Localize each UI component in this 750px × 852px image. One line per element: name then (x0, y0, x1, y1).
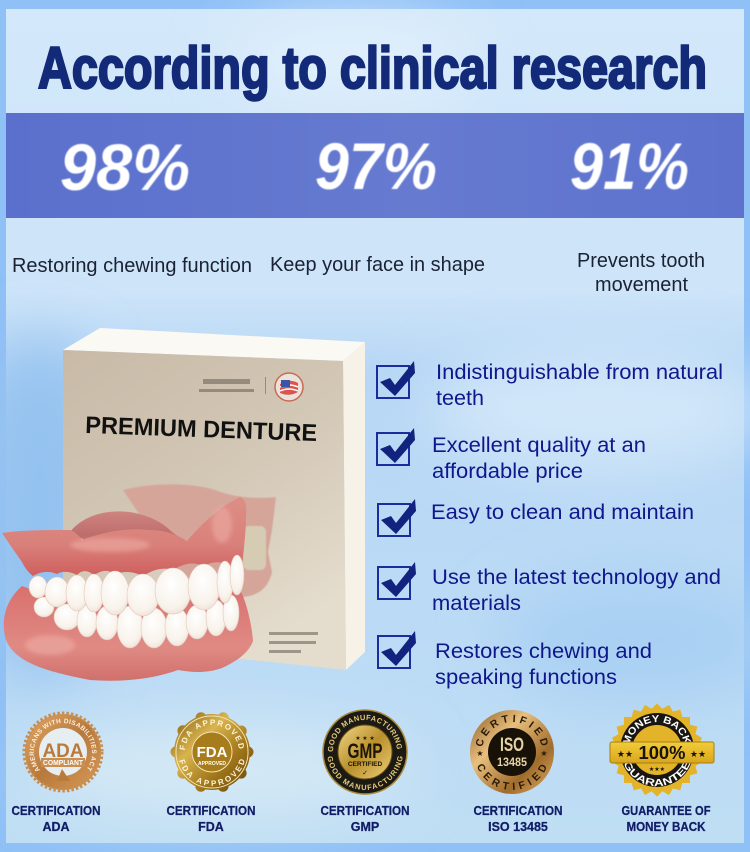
badge: GMP: CERTIFIED (348, 761, 382, 768)
stat: 98%: 98% (60, 130, 190, 204)
badge: money back: GUARANTEE (624, 764, 690, 786)
feature text (432, 434, 646, 483)
badge: ADA: COMPLIANT (43, 760, 84, 767)
label: prevents tooth movement (577, 250, 705, 296)
feature text: speaking functions (435, 666, 617, 689)
lower teeth (34, 595, 239, 648)
badge: FDA: FDA APPROVED (180, 720, 244, 750)
caption: ADA (12, 804, 100, 834)
feature text: Excellent quality at an (432, 434, 646, 457)
statistics band (6, 113, 744, 218)
caption: money back (622, 804, 711, 834)
denture illustration (2, 497, 253, 681)
badge: ADA: AMERICANS WITH DISABILITIES ACT (30, 718, 97, 772)
caption: ISO 13485: ISO 13485 (488, 820, 548, 834)
box top face (63, 328, 365, 361)
badge: FDA: FDA (197, 744, 228, 761)
badge: money back: ★★ (617, 749, 633, 759)
palate (70, 511, 190, 560)
badge: GMP: ★ ★ ★ (355, 735, 375, 742)
feature text (435, 640, 652, 689)
badge: ADA (22, 712, 104, 792)
feature list (377, 361, 723, 689)
caption: ISO 13485: CERTIFICATION (474, 804, 562, 818)
box side face (343, 342, 365, 670)
badge: FDA (170, 712, 254, 792)
feature text: Restores chewing and (435, 640, 652, 663)
badge captions (12, 804, 711, 834)
badge: GMP: ✓ (362, 770, 368, 777)
product box (63, 328, 365, 670)
icon: checkbox (377, 361, 415, 398)
caption: FDA: CERTIFICATION (166, 804, 256, 818)
label: keep your face in shape: Keep your face in shape (270, 254, 485, 276)
caption: ISO 13485 (474, 804, 562, 834)
icon: checkbox (378, 499, 416, 536)
caption: money back: MONEY BACK (626, 820, 706, 834)
caption: ADA: CERTIFICATION (12, 804, 100, 818)
badge: ISO 13485: ★ (540, 749, 548, 758)
feature text: Indistinguishable from natural (436, 361, 723, 384)
feature 1 (377, 361, 723, 410)
feature text (432, 566, 721, 615)
caption: money back: GUARANTEE OF (622, 804, 711, 818)
caption: GMP: CERTIFICATION (320, 804, 410, 818)
feature 3 (378, 499, 694, 536)
label: prevents tooth movement: Prevents tooth (577, 250, 705, 272)
badge: ISO 13485 (470, 710, 554, 794)
caption: ADA: ADA (42, 820, 70, 834)
feature text (436, 361, 723, 410)
label: prevents tooth movement: movement (595, 274, 688, 296)
badge: GMP: GMP (348, 740, 382, 763)
icon: checkbox (377, 428, 415, 465)
feature 5 (378, 631, 652, 689)
badge: GMP: GOOD MANUFACTURING (328, 714, 402, 752)
icon: checkbox (378, 631, 416, 668)
lower gum (4, 586, 253, 681)
badge: money back: 100% (638, 743, 686, 763)
badge: GMP: GOOD MANUFACTURING (328, 756, 402, 790)
feature text: Use the latest technology and (432, 566, 721, 589)
feature 4 (378, 562, 721, 615)
badge: ISO 13485: 13485 (497, 755, 527, 769)
stat: 97%: 97% (315, 129, 437, 203)
caption: GMP: GMP (351, 820, 379, 834)
badge: money back: ★★ (690, 749, 706, 759)
badge: money back: MONEY BACK (623, 715, 691, 742)
feature text: affordable price (432, 460, 583, 483)
icon: checkbox (378, 562, 416, 599)
icon: flag seal (275, 373, 303, 401)
badge: money back (610, 704, 714, 796)
gum highlights (25, 507, 232, 655)
caption: FDA: FDA (198, 820, 224, 834)
caption: GMP (320, 804, 410, 834)
box front face (63, 350, 346, 670)
badge: money back: ★★★ (649, 766, 665, 773)
faded denture on box (123, 484, 276, 600)
feature text: teeth (436, 387, 484, 410)
feature text: materials (432, 592, 521, 615)
box fine print (199, 377, 318, 653)
feature text: Easy to clean and maintain (431, 501, 694, 524)
box title: PREMIUM DENTURE (85, 412, 318, 447)
badge: ADA: ADA (42, 741, 84, 762)
badge: FDA: APPROVED (198, 761, 226, 767)
badge: GMP (322, 709, 408, 795)
badge: FDA: FDA APPROVED (179, 759, 244, 786)
badge: ISO 13485: CERTIFIED (476, 714, 548, 746)
badge: ISO 13485: ★ (476, 749, 484, 758)
badge: ISO 13485: ISO (500, 735, 524, 756)
upper gum (2, 497, 246, 576)
feature 2 (377, 428, 646, 483)
stat: 91%: 91% (570, 129, 689, 203)
upper teeth (29, 555, 244, 616)
caption: FDA (166, 804, 256, 834)
badge: ISO 13485: CERTIFIED (478, 764, 546, 790)
label: restoring chewing function: Restoring chewing function (12, 255, 252, 277)
